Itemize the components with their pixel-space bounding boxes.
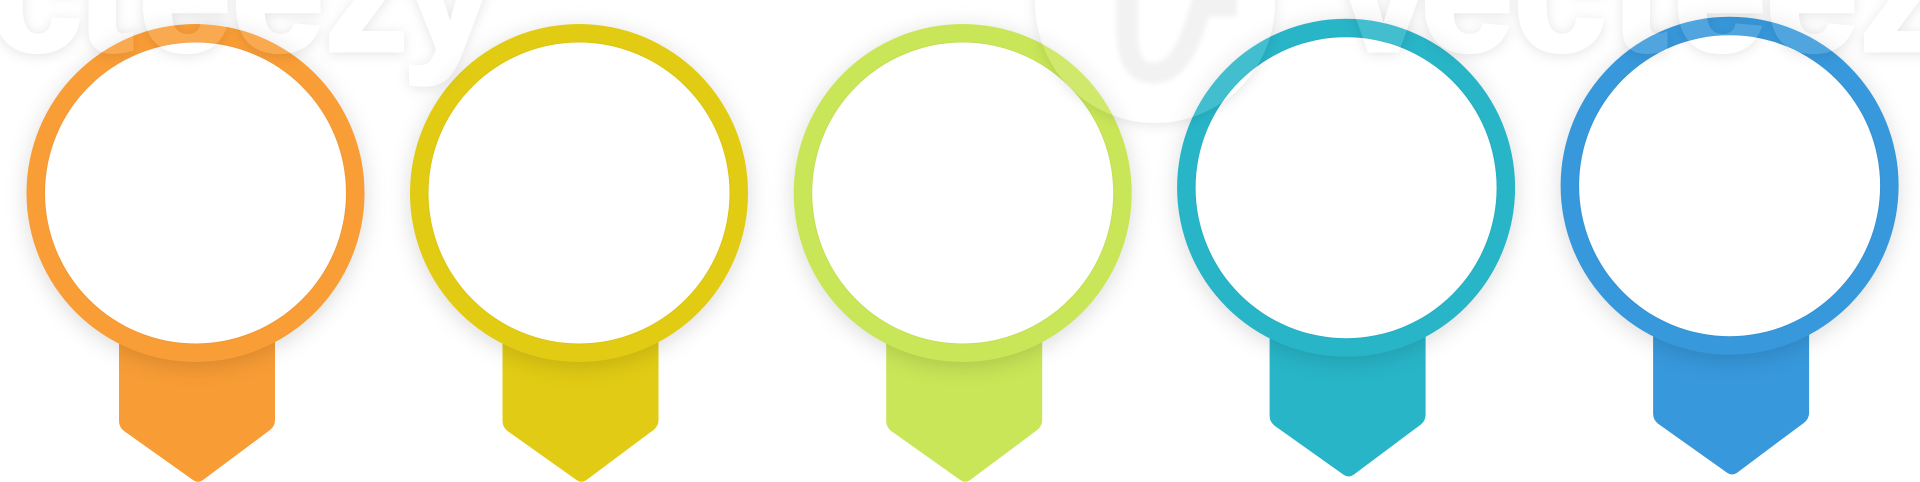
watermark logo glyph (1127, 0, 1237, 73)
watermark (0, 0, 1920, 123)
pin 3 white centre (812, 42, 1113, 344)
pin 4: teal (1177, 19, 1515, 476)
pin 5 pointer tag (1653, 333, 1809, 474)
pin 1: orange (26, 24, 364, 482)
pin 5 white centre (1579, 35, 1880, 336)
pin 3 pointer tag (886, 340, 1042, 482)
pin 4 ring (1177, 19, 1515, 357)
pin 5 ring (1561, 17, 1899, 355)
pin 4 pointer tag (1270, 335, 1426, 476)
pin 1 white centre (45, 42, 346, 344)
pin 2: yellow (410, 24, 748, 482)
pin 2 white centre (428, 42, 730, 344)
pin 2 ring (410, 24, 748, 362)
pin 3 ring (794, 24, 1132, 362)
pin 3: lime (794, 24, 1132, 482)
pin 5: blue (1561, 17, 1899, 474)
pin 1 ring (26, 24, 364, 362)
watermark logo disc (1035, 0, 1275, 123)
pin 2 pointer tag (502, 340, 658, 482)
pin 1 pointer tag (119, 340, 275, 482)
pin 4 white centre (1196, 37, 1497, 338)
